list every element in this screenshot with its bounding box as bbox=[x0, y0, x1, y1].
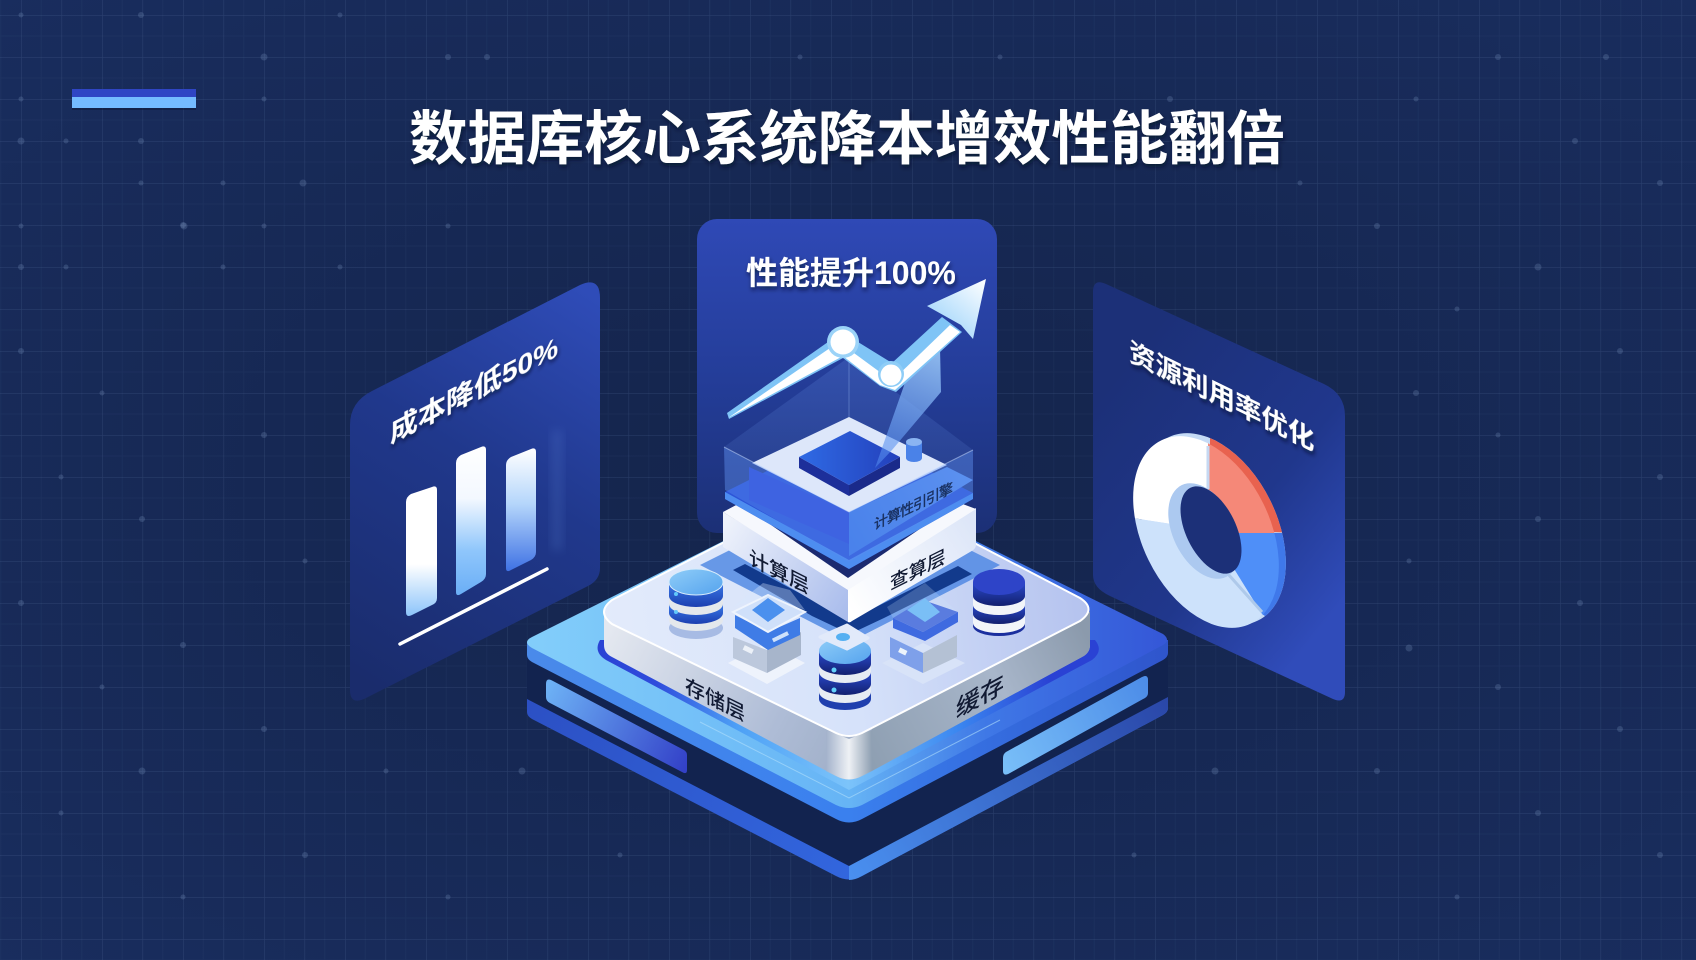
panel: performance bbox=[697, 219, 997, 533]
database cylinder left bbox=[669, 569, 723, 639]
side light strip left bbox=[546, 680, 687, 773]
glass front bbox=[724, 447, 973, 562]
compute layer block bbox=[723, 466, 976, 622]
title: 数据库核心系统降本增效性能翻倍 bbox=[409, 107, 1285, 172]
panel heading: performance: 性能提升100% bbox=[746, 255, 956, 291]
label: engine: 计算性引引擎 bbox=[874, 480, 953, 534]
panel heading: resources: 资源利用率优化 bbox=[1129, 336, 1314, 457]
blue band around compute block bbox=[700, 490, 1000, 642]
base plate bbox=[725, 430, 973, 569]
side light strip right bbox=[1003, 676, 1148, 775]
panel: cost reduction bbox=[350, 282, 600, 701]
isometric platform bbox=[527, 478, 1168, 880]
dark slot left bbox=[733, 564, 850, 634]
panel: resource utilization bbox=[1093, 282, 1345, 700]
top plate bbox=[527, 478, 1168, 822]
donut hole bbox=[1168, 477, 1254, 583]
panel heading: cost: 成本降低50% bbox=[390, 331, 558, 450]
label: storage layer: 存储层 bbox=[685, 674, 745, 726]
engine stage with glass cover bbox=[724, 357, 973, 569]
storage box right bbox=[882, 583, 965, 684]
label: cache: 缓存 bbox=[956, 670, 1004, 724]
accent bar bbox=[72, 89, 196, 110]
database cylinder front bbox=[819, 625, 871, 710]
label: compute layer: 计算层 bbox=[749, 546, 809, 599]
database cylinder right bbox=[973, 569, 1025, 636]
performance arrow bbox=[727, 279, 986, 468]
bar chart bbox=[406, 430, 562, 616]
dark core bbox=[527, 655, 1168, 866]
label: query layer: 查算层 bbox=[890, 546, 945, 595]
small cylinder bbox=[906, 438, 922, 462]
storage slab bbox=[604, 482, 1090, 780]
glass back wall bbox=[724, 357, 973, 562]
lower slab bbox=[527, 695, 1168, 880]
chart axis bbox=[400, 569, 547, 644]
dark slot right bbox=[850, 566, 972, 634]
donut chart bbox=[1133, 433, 1286, 628]
chip bbox=[799, 457, 849, 496]
slab glow ring bbox=[598, 640, 1099, 790]
storage box left bbox=[728, 583, 805, 684]
stage bbox=[749, 467, 849, 544]
